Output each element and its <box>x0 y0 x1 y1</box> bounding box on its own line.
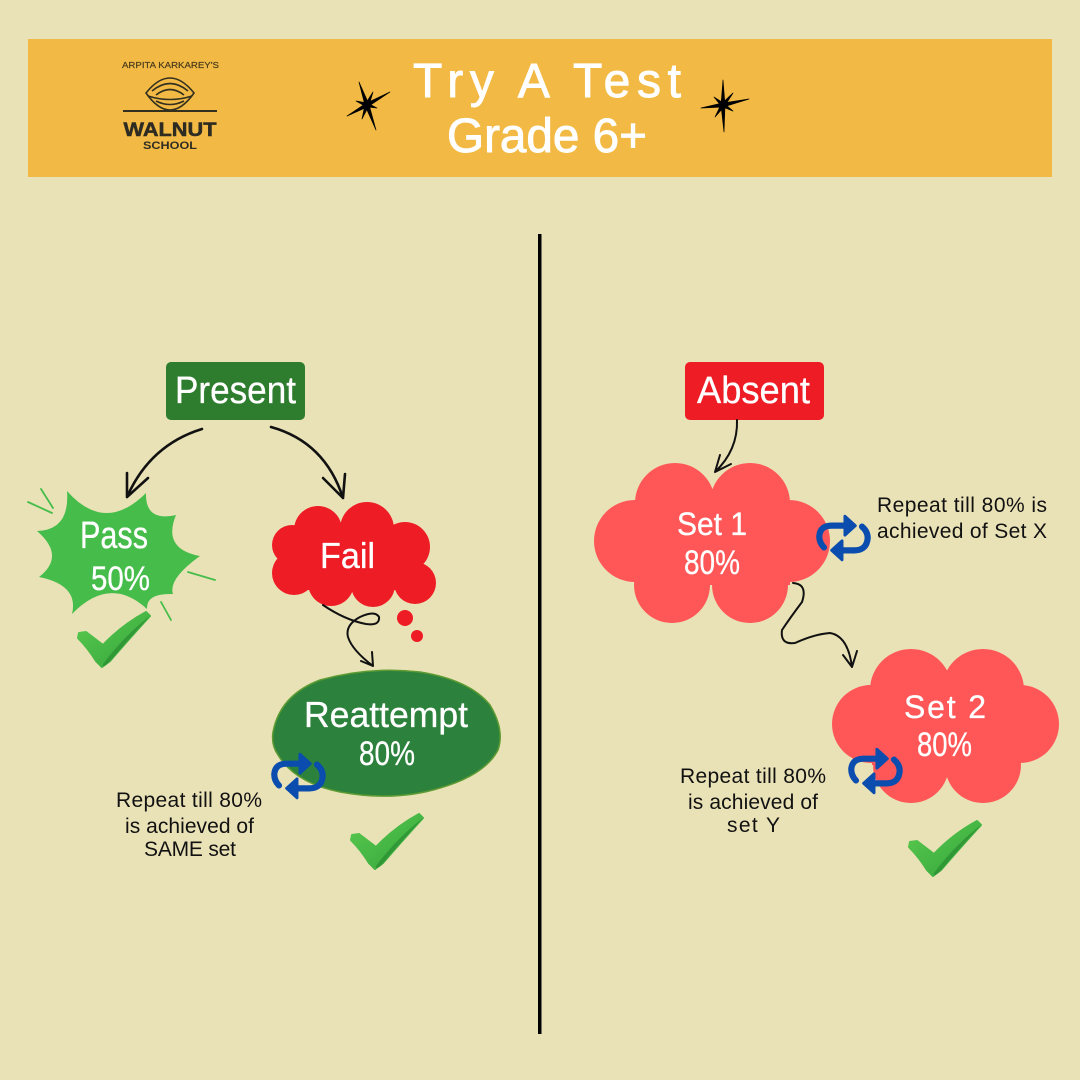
fail thought cloud: Fail <box>320 535 375 576</box>
icon: reattempt check <box>351 814 423 869</box>
heading: Present: Present <box>175 370 296 412</box>
note: repeat set y: Repeat till 80% <box>680 765 826 788</box>
pass burst: Pass <box>80 515 148 557</box>
set 2 cloud: 80% <box>917 726 972 764</box>
icon: repeat <box>274 754 323 798</box>
panel: present branch <box>28 362 500 869</box>
note: repeat set x: Repeat till 80% is <box>877 494 1047 517</box>
icon: right star <box>701 80 749 132</box>
header banner <box>28 39 1052 177</box>
note: repeat set y: set Y <box>727 814 780 837</box>
note: repeat set y <box>680 765 826 837</box>
fail thought cloud <box>272 502 436 642</box>
heading: Present <box>166 362 305 420</box>
title: Try A Test <box>413 55 681 108</box>
arrow: present to fail <box>271 427 345 498</box>
note: repeat set x: achieved of Set X <box>877 520 1047 543</box>
set 2 cloud: Set 2 <box>904 689 986 725</box>
reattempt blob: Reattempt <box>304 694 468 735</box>
logo: Walnut School: SCHOOL <box>143 140 197 152</box>
pass burst: 50% <box>91 560 150 598</box>
pass burst <box>28 489 215 620</box>
logo: Walnut School <box>122 60 219 152</box>
center divider <box>538 234 542 1034</box>
set 1 cloud: Set 1 <box>677 506 747 542</box>
note: repeat same set: SAME set <box>144 838 236 861</box>
title: Grade 6+ <box>447 110 647 163</box>
arrow: fail to reattempt <box>323 605 379 666</box>
logo: Walnut School: WALNUT <box>124 120 217 141</box>
note: repeat set y: is achieved of <box>688 791 818 814</box>
arrow: set 1 to set 2 <box>782 583 857 667</box>
arrow: present to pass <box>127 429 202 497</box>
note: repeat set x <box>877 494 1047 543</box>
icon: repeat set 2 <box>851 749 900 793</box>
icon: left star <box>347 82 390 130</box>
logo: Walnut School: ARPITA KARKAREY'S <box>122 60 219 70</box>
title <box>413 55 681 163</box>
note: repeat same set: is achieved of <box>125 815 254 838</box>
reattempt blob <box>273 670 500 796</box>
heading: Absent: Absent <box>697 370 810 412</box>
panel: absent branch <box>594 362 1059 876</box>
set 1 cloud <box>594 463 830 623</box>
heading: Absent <box>685 362 824 420</box>
set 1 cloud: 80% <box>684 544 740 582</box>
icon: repeat set 1 <box>819 516 868 560</box>
reattempt blob: 80% <box>359 735 415 773</box>
arrow: absent to set 1 <box>715 420 737 472</box>
note: repeat same set <box>116 789 262 861</box>
icon: set 2 check <box>909 821 981 876</box>
icon: pass check <box>78 612 150 667</box>
set 2 cloud <box>832 649 1059 803</box>
note: repeat same set: Repeat till 80% <box>116 789 262 812</box>
